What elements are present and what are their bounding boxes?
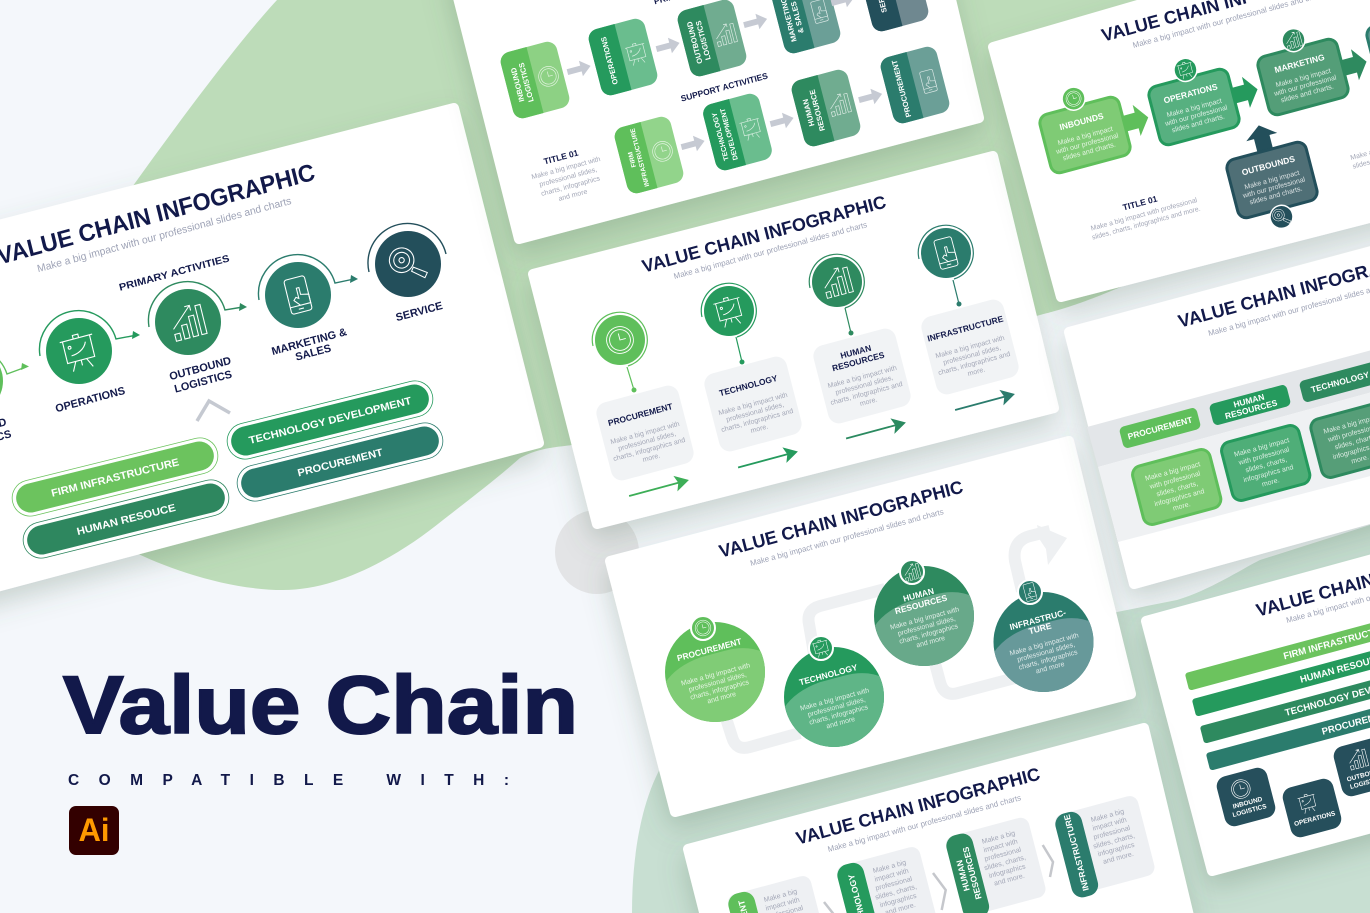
slide subtitle: Make a big impact with our professional slides and charts (749, 507, 944, 568)
pill: human resouce (19, 476, 233, 562)
circle: human resources: and more (916, 635, 946, 649)
card: infrastructure (1053, 794, 1157, 900)
step: infrastructure: professional slides, (943, 345, 1002, 367)
tile: technology development: TECHNOLOGY (711, 111, 731, 161)
circle: technology: Make a big impact with (800, 687, 870, 713)
box: operations: slides and charts. (1171, 113, 1226, 134)
circle: human resources (874, 561, 974, 666)
text block: title 01: slides, charts, infographics and more. (1091, 206, 1201, 242)
step: marketing and sales: MARKETING & (270, 326, 348, 358)
text block: title 01: TITLE 01 (543, 147, 580, 166)
step: human resources: charts, infographics and (830, 381, 903, 407)
step: operations: OPERATIONS (54, 385, 126, 415)
step: technology: TECHNOLOGY (718, 373, 779, 398)
tile: human resource: HUMAN (801, 98, 816, 127)
step: human resources: Make a big impact with (827, 365, 898, 390)
step: technology: charts, infographics and (721, 408, 794, 434)
panel: process boxes slide (993, 0, 1370, 297)
tile: procurement (879, 44, 951, 126)
circle: infrastructure: charts, infographics (1018, 649, 1079, 672)
card: technology: slides, charts, (875, 884, 918, 902)
circle: procurement: Make a big impact with (681, 662, 751, 688)
circle: human resources: charts, infographics (899, 623, 959, 646)
text block: title 01: and more (558, 189, 588, 203)
body box: human resources: with professional (1237, 446, 1291, 467)
card: technology: impact with (874, 868, 910, 884)
body box: human resources: more. (1261, 477, 1280, 489)
step: procurement: charts, infographics and (613, 437, 686, 463)
green background blob (100, 0, 1370, 590)
panel: circles snake slide (610, 441, 1131, 812)
circle: human resources: RESOURCES (894, 592, 949, 616)
step: technology: more. (750, 423, 769, 435)
step: infrastructure: charts, infographics and (938, 351, 1011, 377)
box: outbounds: slides and charts. (1249, 186, 1303, 206)
box: marketing (1251, 18, 1350, 117)
tile: operations: OPERATIONS (1294, 810, 1337, 828)
circle: human resources: professional slides, (897, 616, 956, 638)
tile: operations (587, 16, 659, 98)
circle: infrastructure: TURE (1028, 620, 1053, 636)
step: marketing and sales (258, 255, 358, 364)
chevron pointing up (197, 401, 230, 421)
pill: technology development: TECHNOLOGY DEVELOPMENT (248, 396, 413, 447)
panel: vertical label cards slide (688, 728, 1190, 913)
card: infrastructure: INFRASTRUCTURE (1062, 813, 1091, 892)
step: service: SERVICE (395, 300, 444, 324)
bar: human resource (1192, 621, 1370, 717)
body box: technology: more. (1351, 454, 1370, 466)
step: technology: Make a big impact with (718, 392, 788, 417)
card: infrastructure: impact with (1092, 817, 1128, 833)
tile: human resource (790, 67, 862, 149)
text block: title 01 (1086, 183, 1201, 242)
slide subtitle: Make a big impact with our professional slides and charts (673, 220, 868, 281)
box: inbounds (1033, 76, 1132, 175)
arrow: outbounds up (1243, 121, 1281, 155)
body box: human resources: slides, charts, (1245, 456, 1288, 474)
support activities heading: SUPPORT ACTIVITIES (680, 70, 769, 104)
chevron (1043, 845, 1053, 877)
tile: inbound logistics (1215, 766, 1277, 828)
circle: procurement (665, 617, 765, 722)
circle: procurement: charts, infographics (690, 679, 750, 702)
circle: human resources: Make a big impact with (890, 606, 960, 632)
step: outbound logistics (148, 282, 247, 396)
box: next step, cropped (1365, 7, 1370, 87)
slide title: VALUE CHAIN INFOGRAPHIC (717, 477, 965, 562)
tile: human resource: RESOURCE (808, 89, 827, 132)
tile: technology development (701, 91, 774, 173)
box: inbounds: INBOUNDS (1058, 111, 1105, 132)
slide title: VALUE CHAIN INFOGRAPHIC (0, 159, 318, 270)
circle: infrastructure: and more (1035, 661, 1065, 675)
panel: column table slide (1069, 238, 1370, 584)
box: marketing: MARKETING (1273, 52, 1326, 75)
circle: technology: and more (826, 716, 856, 730)
tile: inbound logistics (499, 39, 571, 121)
tile: inbound logistics: INBOUND (1232, 796, 1263, 811)
panel: bars and tiles slide (1146, 536, 1370, 871)
card: technology: infographics (879, 893, 918, 909)
circle: infrastructure: Make a big impact with (1009, 632, 1080, 658)
pill: firm infrastructure (8, 434, 222, 520)
card: human resources (944, 816, 1048, 913)
text block: title 01 (527, 142, 608, 208)
tile: inbound logistics: INBOUND (509, 66, 526, 103)
text block: title 01: Make a big impact with professional (1090, 197, 1198, 233)
header: human resources: RESOURCES (1224, 397, 1279, 421)
step: service (368, 223, 446, 324)
box: marketing: with our professional (1273, 74, 1338, 98)
box: operations (1142, 48, 1241, 147)
body box: procurement: slides, charts, (1156, 480, 1199, 498)
slide title: VALUE CHAIN INFOGRAPHIC (640, 192, 888, 277)
step: marketing and sales: SALES (294, 342, 332, 364)
panel: vertical timeline cards slide (533, 156, 1054, 524)
step: human resources: RESOURCES (831, 350, 886, 373)
body box: technology (1309, 400, 1370, 480)
step: human resources (809, 254, 913, 446)
text block: title 01: TITLE 01 (1122, 193, 1159, 212)
text block: title 01: charts, infographics (541, 175, 601, 198)
circle: procurement: and more (707, 691, 737, 705)
header: procurement: PROCUREMENT (1127, 414, 1194, 442)
tile: marketing and sales: & SALES (789, 0, 806, 34)
box: marketing: slides and charts. (1280, 83, 1335, 104)
card: human resources: professional (984, 846, 1022, 863)
box: operations: with our professional (1164, 104, 1229, 128)
pill: procurement (233, 419, 447, 505)
body box: human resources: infographics and (1243, 464, 1294, 484)
header: human resources (1209, 384, 1291, 426)
tile: inbound logistics: LOGISTICS (1232, 803, 1268, 819)
step: human resources: more. (859, 396, 878, 408)
body box: human resources (1220, 424, 1312, 502)
step: operations (39, 311, 140, 415)
card: human resources: infographics (988, 863, 1027, 880)
card: infrastructure: Make a big (1090, 808, 1125, 824)
card: human resources: Make a big (981, 830, 1016, 846)
card: human resources: RESOURCES (960, 845, 984, 900)
box: outbounds: Make a big impact (1244, 170, 1300, 191)
step: technology (701, 283, 804, 475)
box: marketing: Make a big impact (1275, 68, 1332, 89)
box: outbounds: with our professional (1241, 176, 1306, 200)
box: operations: Make a big impact (1166, 98, 1223, 119)
card: procurement: Make a big (763, 888, 798, 904)
card: infrastructure: slides, charts, (1093, 833, 1136, 851)
step: outbound logistics: OUTBOUND (168, 355, 232, 383)
body box: procurement: Make a big impact (1145, 461, 1201, 483)
card: human resources: and more. (993, 873, 1026, 888)
pill: technology development (223, 377, 437, 463)
step: technology: professional slides, (726, 402, 785, 424)
header: human resources: HUMAN (1232, 392, 1265, 410)
tile: outbound logistics (1332, 736, 1370, 798)
circle: technology: charts, infographics (809, 704, 869, 727)
box: inbounds: with our professional (1055, 132, 1120, 156)
step: procurement: Make a big impact with (610, 421, 680, 446)
circle: human resources: HUMAN (902, 586, 935, 604)
body box: procurement: more. (1172, 501, 1191, 513)
tile: outbound logistics: LOGISTICS (694, 20, 713, 61)
arrow: marketing to next (1337, 46, 1370, 84)
circle: procurement: professional slides, (688, 672, 747, 694)
slide subtitle: Make a big impact with our professional slides and charts (36, 196, 293, 275)
step: infrastructure (918, 225, 1021, 418)
box: operations: OPERATIONS (1162, 81, 1219, 105)
tile: outbound logistics (676, 0, 748, 79)
compatible with label: COMPATIBLE WITH: (68, 772, 509, 789)
bar: firm infrastructure (1185, 595, 1370, 691)
step: inbound logistics (0, 347, 29, 455)
pill: human resouce: HUMAN RESOUCE (76, 503, 177, 538)
step: procurement: professional slides, (618, 431, 677, 453)
card: infrastructure: infographics (1097, 842, 1136, 858)
tile: operations: OPERATIONS (599, 36, 620, 86)
step: human resources: professional slides, (835, 375, 894, 397)
pill: firm infrastructure: FIRM INFRASTRUCTURE (50, 457, 180, 500)
card: infrastructure: and more. (1102, 851, 1135, 866)
circle: technology: professional slides, (807, 697, 866, 719)
step: infrastructure: INFRASTRUCTURE (926, 313, 1005, 344)
pale green background blob (632, 525, 1370, 913)
card: technology: professional (875, 876, 913, 892)
primary activities heading: PRIMARY ACTIVITIES (118, 253, 231, 294)
bar: technology development (1200, 648, 1370, 744)
box: outbounds (1225, 140, 1324, 239)
step: infrastructure: Make a big impact with (935, 335, 1005, 360)
card: human resources: slides, charts, (984, 854, 1027, 872)
tile: outbound logistics: OUTBOUND (685, 20, 704, 65)
pill: procurement: PROCUREMENT (297, 447, 385, 479)
tile: firm infrastructure (613, 114, 685, 196)
text block: title 01: professional slides, (539, 166, 598, 189)
tile: marketing and sales (770, 0, 842, 56)
card: human resources: HUMAN (954, 859, 972, 892)
arrows: support row (679, 86, 884, 155)
slide subtitle: Make a big impact with our professional slides and charts (827, 793, 1022, 854)
step: procurement (592, 312, 696, 504)
circle: technology: TECHNOLOGY (798, 662, 859, 687)
circle: procurement: PROCUREMENT (676, 636, 743, 663)
icon: adobe illustrator (69, 806, 119, 855)
step: infrastructure: more. (967, 366, 986, 378)
box: outbounds: OUTBOUNDS (1241, 153, 1296, 177)
card: technology: Make a big (872, 859, 907, 875)
card: procurement: impact with (765, 897, 801, 913)
bar: procurement (1206, 675, 1370, 771)
header: procurement (1119, 407, 1201, 449)
body box: procurement (1131, 448, 1223, 526)
tile: procurement: PROCUREMENT (890, 59, 913, 118)
box: inbounds: Make a big impact (1057, 126, 1114, 147)
body box: human resources: Make a big impact (1234, 437, 1290, 459)
panel: tile pipeline slide (451, 0, 979, 239)
table band: header row (1087, 337, 1370, 467)
header: technology (1299, 361, 1370, 403)
step: human resources: HUMAN (839, 343, 872, 361)
slide title: VALUE CHAIN INFOGRAPHIC (794, 764, 1042, 849)
tile: operations (1281, 777, 1343, 839)
step: procurement: more. (642, 452, 661, 464)
tile: technology development: DEVELOPMENT (720, 107, 740, 161)
step: procurement: PROCUREMENT (607, 401, 674, 428)
tile: firm infrastructure: INFRASTRUCTURE (629, 127, 651, 187)
tile: service (858, 0, 930, 34)
arrows: primary row (565, 0, 857, 80)
header: technology: TECHNOLOGY (1310, 369, 1370, 395)
chevron (933, 873, 946, 910)
card: technology (835, 845, 939, 913)
body box: procurement: infographics and (1154, 488, 1205, 508)
step: outbound logistics: LOGISTICS (173, 369, 233, 396)
snake connector with arrow (724, 525, 1067, 748)
icon: adobe illustrator: Ai (78, 812, 110, 848)
tile: inbound logistics: LOGISTICS (517, 62, 536, 103)
circle: infrastructure (994, 580, 1094, 692)
text block: title 01: Make a big impact with (531, 156, 601, 181)
circle: infrastructure: INFRASTRUC- (1008, 607, 1067, 632)
circle: infrastructure: professional slides, (1017, 642, 1076, 664)
main heading: Value Chain (63, 660, 578, 751)
body box: procurement: with professional (1148, 470, 1202, 491)
circle: technology (784, 636, 884, 747)
arrow: inbounds to operations (1119, 102, 1152, 140)
tile: firm infrastructure: FIRM (627, 151, 638, 168)
arrow: operations to marketing (1228, 74, 1262, 112)
grey background circle (555, 510, 639, 594)
chevron (824, 902, 837, 913)
table band: body row (1098, 379, 1370, 542)
card: infrastructure: professional (1093, 825, 1131, 841)
panel: primary activities circles slide (0, 108, 539, 602)
card: human resources: impact with (983, 838, 1019, 854)
box: inbounds: slides and charts. (1062, 141, 1117, 162)
card: procurement (726, 874, 830, 913)
